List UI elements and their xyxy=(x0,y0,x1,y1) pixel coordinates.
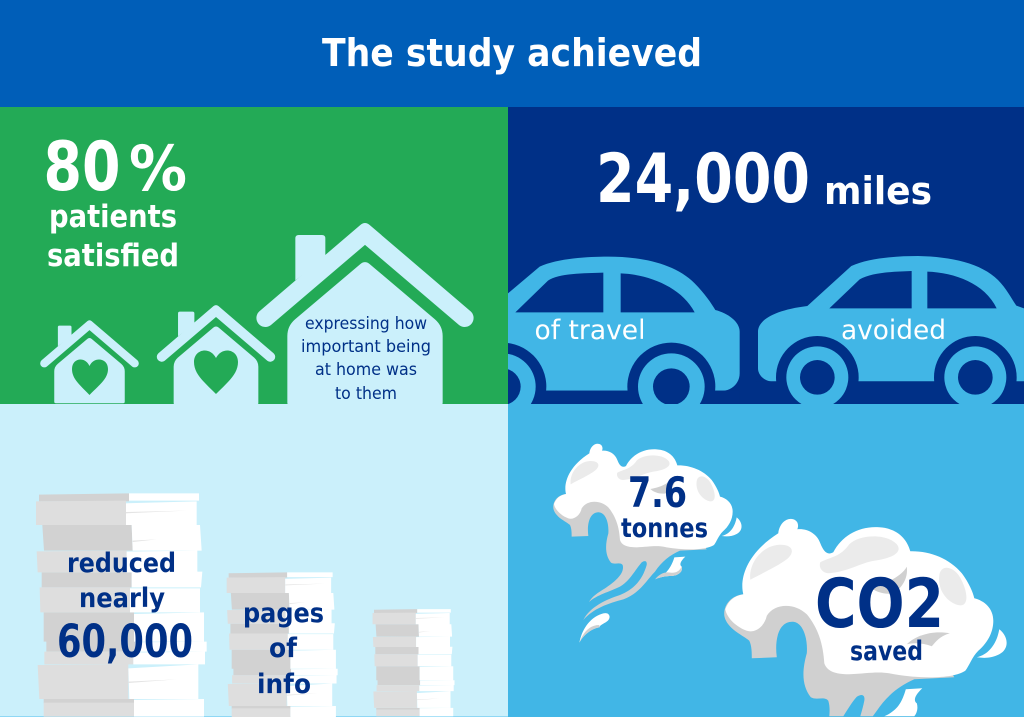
statistic: 7.6 tonnes: tonnes xyxy=(621,513,708,544)
text: patients satisfied: patients xyxy=(49,199,177,235)
statistic: CO2 saved xyxy=(815,565,944,667)
icon: right car xyxy=(756,256,1024,419)
icon: left car xyxy=(508,256,740,404)
text: pages of info: info xyxy=(257,669,311,700)
icon: medium house with heart xyxy=(157,305,275,405)
statistic: 80%: % xyxy=(129,132,187,205)
icon: medium paper stack xyxy=(227,572,338,717)
panel: CO2 saved xyxy=(508,404,1024,717)
statistic: 24,000: 24,000 xyxy=(596,140,810,219)
statistic: 80% xyxy=(44,128,187,207)
statistic: CO2 saved: saved xyxy=(850,636,923,667)
text: patients satisfied xyxy=(47,199,179,274)
text: of travel: of travel xyxy=(534,315,646,346)
panel: header banner xyxy=(0,0,1024,107)
panel: pages reduced xyxy=(0,404,508,717)
text: reduced nearly 60,000 xyxy=(57,548,193,668)
icon: large paper stack xyxy=(36,493,207,717)
text: reduced nearly 60,000: reduced xyxy=(67,548,176,579)
text: expressing how important being at home was to them xyxy=(301,314,431,404)
text: reduced nearly 60,000: nearly xyxy=(79,583,165,614)
text: miles: miles xyxy=(824,169,932,213)
statistic: CO2 saved: CO2 xyxy=(815,565,944,644)
text: expressing how important being at home was to them: at home was xyxy=(315,360,417,380)
statistic: 7.6 tonnes xyxy=(621,468,708,544)
text: avoided: avoided xyxy=(841,315,946,346)
icon: small house with heart xyxy=(40,320,139,403)
icon: large house with text xyxy=(256,223,474,406)
text: pages of info: of xyxy=(269,633,297,664)
text: expressing how important being at home was to them: important being xyxy=(301,337,431,357)
text: pages of info xyxy=(243,598,324,700)
text: reduced nearly 60,000: 60,000 xyxy=(57,615,193,668)
panel: patient satisfaction xyxy=(0,107,508,406)
statistic: 80%: 80 xyxy=(44,128,120,207)
text: patients satisfied: satisfied xyxy=(47,238,179,274)
text: expressing how important being at home was to them: expressing how xyxy=(305,314,427,334)
icon: small smoke cloud xyxy=(553,444,742,643)
text: expressing how important being at home was to them: to them xyxy=(335,384,397,404)
panel: miles avoided xyxy=(508,107,1024,404)
title: The study achieved xyxy=(322,31,702,75)
statistic: 7.6 tonnes: 7.6 xyxy=(628,468,687,517)
icon: small paper stack xyxy=(373,609,454,716)
text: pages of info: pages xyxy=(243,598,324,629)
icon: large smoke cloud xyxy=(724,519,1007,716)
